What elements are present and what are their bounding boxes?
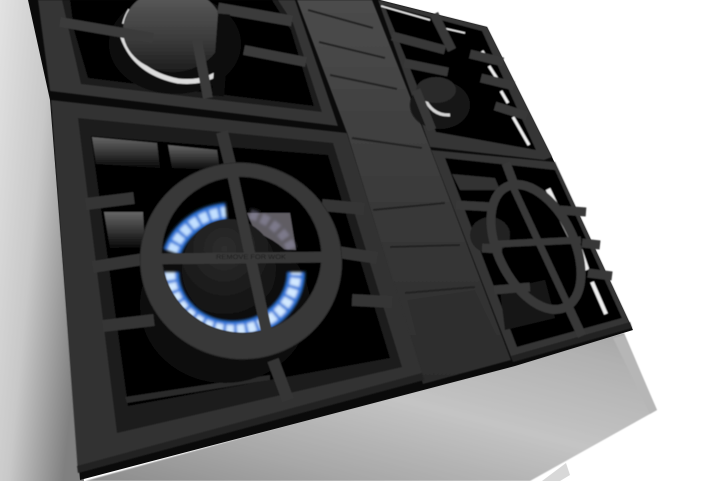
stainless foot xyxy=(542,463,570,481)
shadowed pillar: back left grate xyxy=(218,14,224,96)
burner flame xyxy=(170,212,296,330)
inner wall: front left grate xyxy=(78,118,402,433)
gloss and burner: front right xyxy=(452,174,555,330)
left stainless strip xyxy=(0,0,84,481)
embossed wok label: REMOVE FOR WOK xyxy=(216,255,286,261)
front right burner grate xyxy=(431,150,632,362)
glossy reflections xyxy=(92,137,296,403)
white reflections: front right xyxy=(548,189,606,314)
opening: front left grate xyxy=(91,136,390,406)
wok ring xyxy=(118,140,364,382)
front stainless panel xyxy=(85,333,657,481)
back left burner grate xyxy=(38,0,338,126)
wok ring: front right xyxy=(472,170,600,324)
center griddle panel xyxy=(297,0,511,384)
burner cap xyxy=(182,219,276,319)
fingers: back right grate xyxy=(392,14,527,130)
back right burner xyxy=(410,77,470,129)
front left burner grate xyxy=(51,100,424,473)
grate fingers xyxy=(86,132,392,400)
burner: back left xyxy=(109,0,241,94)
fingers: front right grate xyxy=(456,163,612,336)
white reflections: back right xyxy=(381,6,529,145)
fingers: back left grate xyxy=(60,8,306,98)
back right burner grate xyxy=(378,0,552,160)
griddle seams xyxy=(308,10,475,293)
